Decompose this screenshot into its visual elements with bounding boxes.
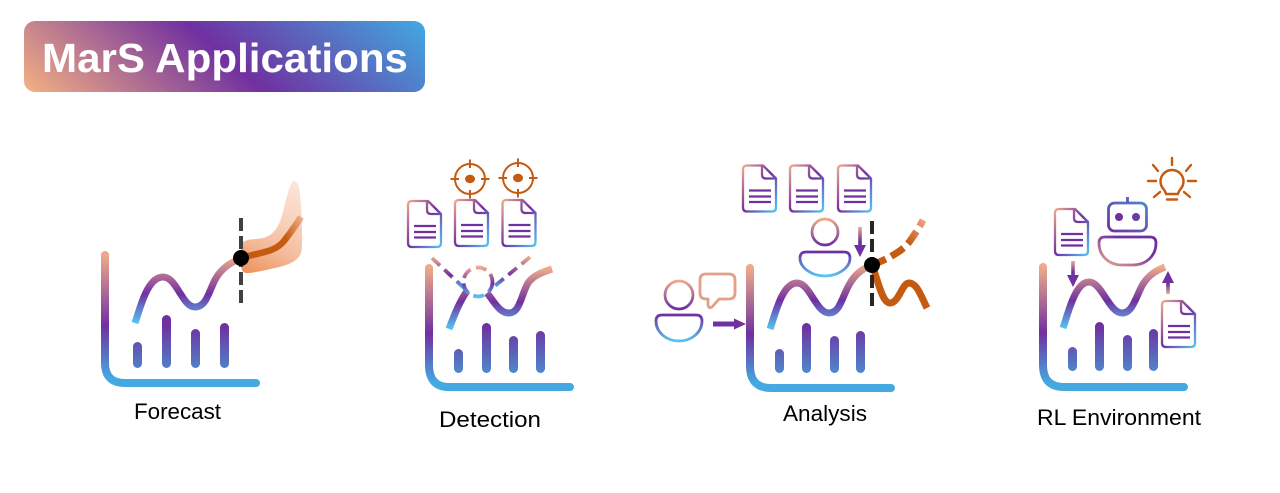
light bulb icon bbox=[1148, 158, 1196, 200]
detection targets bbox=[450, 158, 538, 198]
panel: forecast bbox=[105, 181, 302, 424]
analysis documents bbox=[743, 166, 871, 212]
analysis point bbox=[864, 257, 880, 273]
panel: analysis bbox=[656, 166, 927, 426]
right arrow into chart bbox=[713, 318, 746, 330]
down arrow to point bbox=[854, 227, 866, 257]
RL input document bbox=[1055, 209, 1088, 255]
RL label: RL Environment bbox=[1037, 405, 1201, 430]
analysis dashed branch bbox=[872, 220, 923, 265]
forecast dashed divider bbox=[239, 218, 243, 304]
RL line bbox=[1063, 267, 1165, 328]
anomaly dashed marker bbox=[432, 257, 530, 296]
panel: RL environment bbox=[1037, 158, 1201, 430]
forecast prediction line bbox=[241, 217, 301, 258]
RL bars bbox=[1068, 322, 1158, 371]
detection line bbox=[449, 269, 552, 329]
analysis axes bbox=[750, 268, 891, 388]
RL up arrow bbox=[1162, 271, 1174, 294]
analysis label: Analysis bbox=[783, 401, 867, 426]
detection bars bbox=[454, 323, 545, 373]
detection axes bbox=[429, 268, 570, 387]
analysis bars bbox=[775, 323, 865, 373]
RL output document bbox=[1162, 301, 1195, 347]
speech bubble bbox=[700, 274, 735, 308]
detection label: Detection bbox=[439, 407, 541, 432]
forecast point bbox=[233, 250, 249, 266]
forecast uncertainty band bbox=[241, 181, 302, 273]
panel: detection bbox=[408, 158, 570, 432]
RL down arrow bbox=[1067, 261, 1079, 287]
analysis dashed divider bbox=[870, 221, 874, 307]
analysis solid branch bbox=[872, 265, 927, 308]
robot icon bbox=[1099, 197, 1156, 265]
forecast history line bbox=[135, 258, 241, 323]
title banner: MarS Applications bbox=[42, 35, 408, 81]
top person icon bbox=[800, 219, 850, 276]
forecast axes bbox=[105, 255, 256, 383]
forecast label: Forecast bbox=[134, 399, 221, 424]
left person icon bbox=[656, 281, 702, 341]
detection documents bbox=[408, 200, 536, 247]
RL axes bbox=[1043, 267, 1184, 387]
title banner bbox=[24, 21, 425, 92]
analysis line bbox=[770, 265, 872, 329]
forecast bars bbox=[133, 315, 229, 368]
